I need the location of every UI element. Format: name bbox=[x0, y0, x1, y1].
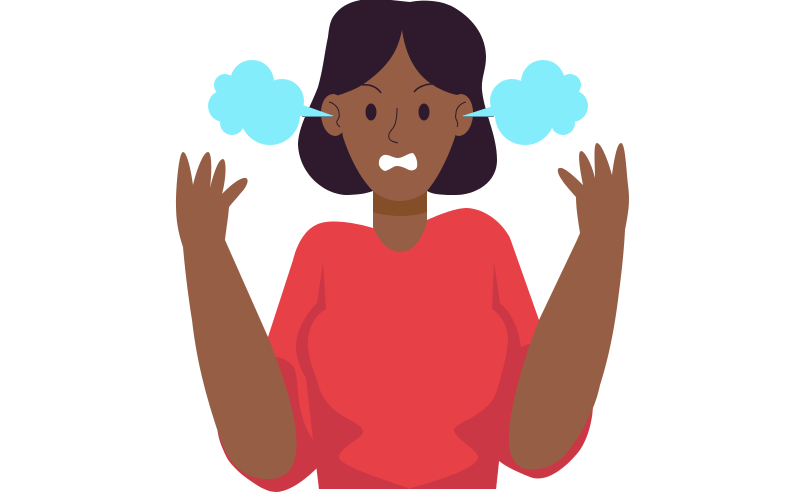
right ear bbox=[445, 93, 475, 137]
left ear bbox=[319, 93, 349, 137]
right eye bbox=[418, 104, 430, 120]
left eye bbox=[366, 104, 376, 120]
right body fold and sleeve shading bbox=[408, 262, 600, 489]
right steam cloud bbox=[462, 60, 588, 145]
left eyebrow bbox=[362, 85, 381, 93]
left arm and hand bbox=[176, 152, 297, 479]
right ear line bbox=[456, 102, 466, 127]
nose bbox=[389, 108, 398, 143]
shirt bbox=[217, 208, 600, 492]
left ear line bbox=[329, 102, 340, 127]
left steam jet bbox=[298, 105, 334, 116]
left body fold bbox=[296, 262, 408, 489]
hair bbox=[298, 0, 497, 195]
left sleeve shading bbox=[217, 356, 317, 492]
right steam jet bbox=[462, 106, 497, 116]
neck bbox=[373, 185, 427, 252]
shirt body bbox=[250, 208, 560, 489]
mouth bbox=[379, 153, 417, 171]
right arm and hand bbox=[509, 143, 629, 469]
right eyebrow bbox=[414, 84, 433, 92]
head bbox=[336, 30, 462, 201]
face bbox=[319, 30, 475, 201]
left steam cloud bbox=[208, 60, 334, 145]
neck shadow bbox=[373, 185, 427, 216]
